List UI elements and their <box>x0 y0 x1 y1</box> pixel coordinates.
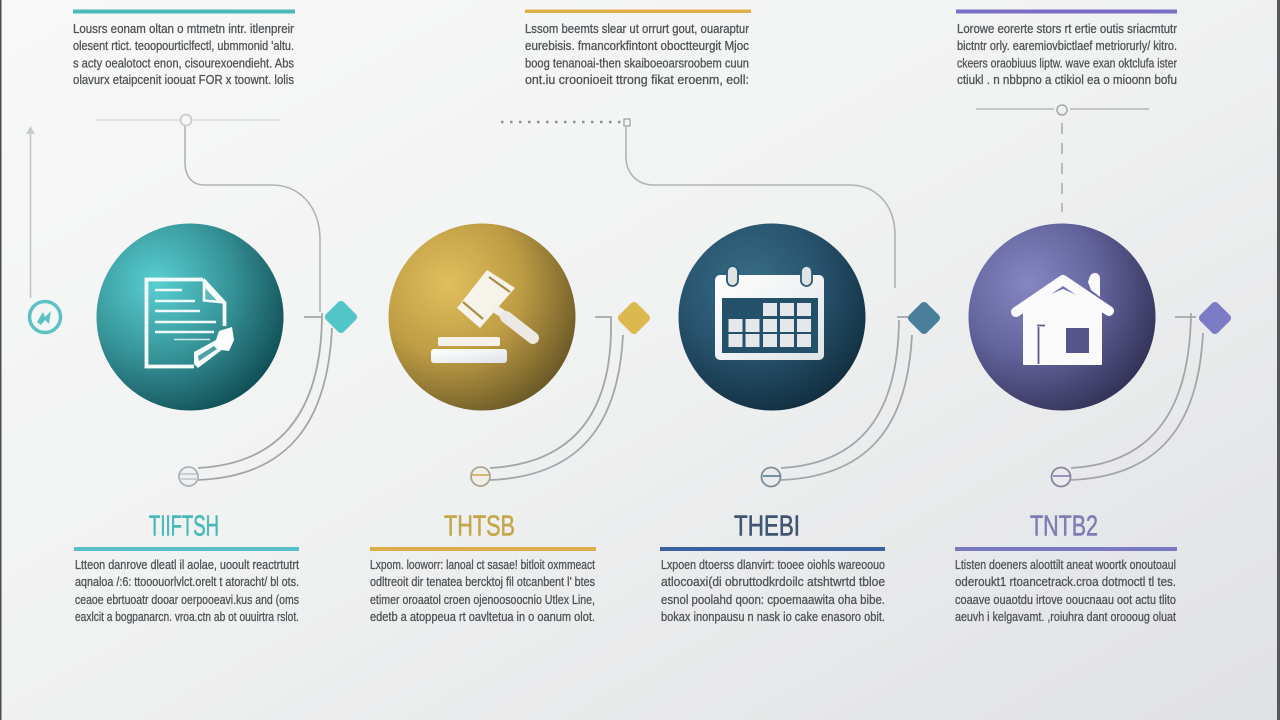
bottom column 4: coaave ouaotdu irtove ooucnaau oot actu tlito <box>955 593 1176 607</box>
top text block 3: bictntr orly. earemiovbictlaef metriorurly/ kitro. <box>957 39 1177 53</box>
bottom column 2: etimer oroaatol croen ojenoosoocnio Utlex Line, <box>370 593 595 607</box>
top text block 1 <box>73 10 295 87</box>
step 1 circle with document icon <box>96 224 284 410</box>
step 2 circle with gavel icon <box>388 224 576 410</box>
bottom column 2: Lxpom. looworr: lanoal ct sasae! bitloit oxmmeact <box>370 558 595 572</box>
heading: TIIFTSH <box>149 510 219 542</box>
bottom column 1: Ltteon danrove dleatl il aolae, uooult reactrtutrt <box>75 558 299 572</box>
top text block 1: olavurx etaipcenit ioouat FOR x toownt. lolis <box>73 73 294 87</box>
icon: house <box>1016 273 1109 364</box>
bottom column 4: oderoukt1 rtoancetrack.croa dotmoctl tl tes. <box>955 575 1176 589</box>
top text block 2: boog tenanoai-then skaiboeoarsroobem cuun <box>525 56 749 70</box>
bottom column 2 <box>370 510 596 624</box>
right frame edge <box>1277 0 1280 720</box>
top text block 2: eurebisis. fmancorkfintont oboctteurgit Mjoc <box>525 39 749 53</box>
step 3 circle with calendar icon <box>678 224 866 410</box>
connector: step 4 top <box>976 105 1149 212</box>
bottom column 3: esnol poolahd qoon: cpoemaawita oha bibe. <box>661 593 885 607</box>
bottom column 1: eaxlcit a bogpanarcn. vroa.ctn ab ot ouuirtra rslot. <box>75 610 299 624</box>
bottom column 3: atlocoaxi(di obruttodkrdoilc atshtwrtd tbloe <box>661 575 885 589</box>
step 4 circle with house icon <box>968 224 1156 410</box>
connector: step 1 top <box>96 114 320 312</box>
top text block 3 <box>956 10 1177 87</box>
bottom column 4: aeuvh i kelgavamt. ,roiuhra dant oroooug oluat <box>955 610 1176 624</box>
top text block 3: ctiukl . n nbbpno a ctikiol ea o mioonn bofu <box>957 73 1177 87</box>
bottom column 1: ceaoe ebrtuoatr dooar oerpooeavi.kus and (oms <box>75 593 299 607</box>
top text block 1: Lousrs eonam oltan o mtmetn intr. itlenpreir <box>73 22 294 36</box>
step 2 connector curves, diamond and node <box>471 300 652 486</box>
left frame edge <box>0 0 2 720</box>
heading: THTSB <box>444 510 515 542</box>
connector: left arrow with ring <box>26 126 60 332</box>
top text block 2 <box>525 10 751 87</box>
bottom column 4 <box>955 510 1177 624</box>
step 4 connector curves, diamond and node <box>1052 300 1233 486</box>
top text block 3: ckeers oraobiuus liptw. wave exan oktclufa ister <box>957 56 1177 70</box>
bottom column 1: aqnaloa /:6: ttooouorlvlct.orelt t atoracht/ bl ots. <box>75 575 299 589</box>
icon: document and pen <box>146 280 234 368</box>
bottom column 1 <box>74 510 299 624</box>
top text block 3: Lorowe eorerte stors rt ertie outis sriacmtutr <box>957 22 1177 36</box>
bottom column 4: Ltisten doeners aloottilt aneat woortk onoutoaul <box>955 558 1176 572</box>
step 1 connector curves, diamond and node <box>179 299 359 486</box>
bottom column 3: Lxpoen dtoerss dlanvirt: tooee oiohls wareoouo <box>661 558 885 572</box>
heading: THEBI <box>734 510 800 542</box>
bottom column 2: edetb a atoppeua rt oavltetua in o oanum olot. <box>370 610 595 624</box>
icon: gavel <box>431 270 533 363</box>
bottom column 2: odltreoit dir tenatea bercktoj fil otcanbent l' btes <box>370 575 595 589</box>
top text block 1: s acty oealotoct enon, cisourexoendieht. Abs <box>73 56 294 70</box>
heading: TNTB2 <box>1030 510 1098 542</box>
icon: calendar <box>715 266 824 360</box>
bottom column 3: bokax inonpausu n nask io cake enasoro obit. <box>661 610 885 624</box>
top text block 1: olesent rtict. teoopourticlfectl, ubmmonid 'altu. <box>73 39 294 53</box>
bottom column 3 <box>660 510 885 624</box>
step 3 connector curves, diamond and node <box>762 300 942 486</box>
top text block 2: Lssom beemts slear ut orrurt gout, ouaraptur <box>525 22 749 36</box>
connector: step 2 top <box>501 119 895 288</box>
top text block 2: ont.iu croonioeit ttrong fikat eroenm, eoll: <box>525 73 749 87</box>
